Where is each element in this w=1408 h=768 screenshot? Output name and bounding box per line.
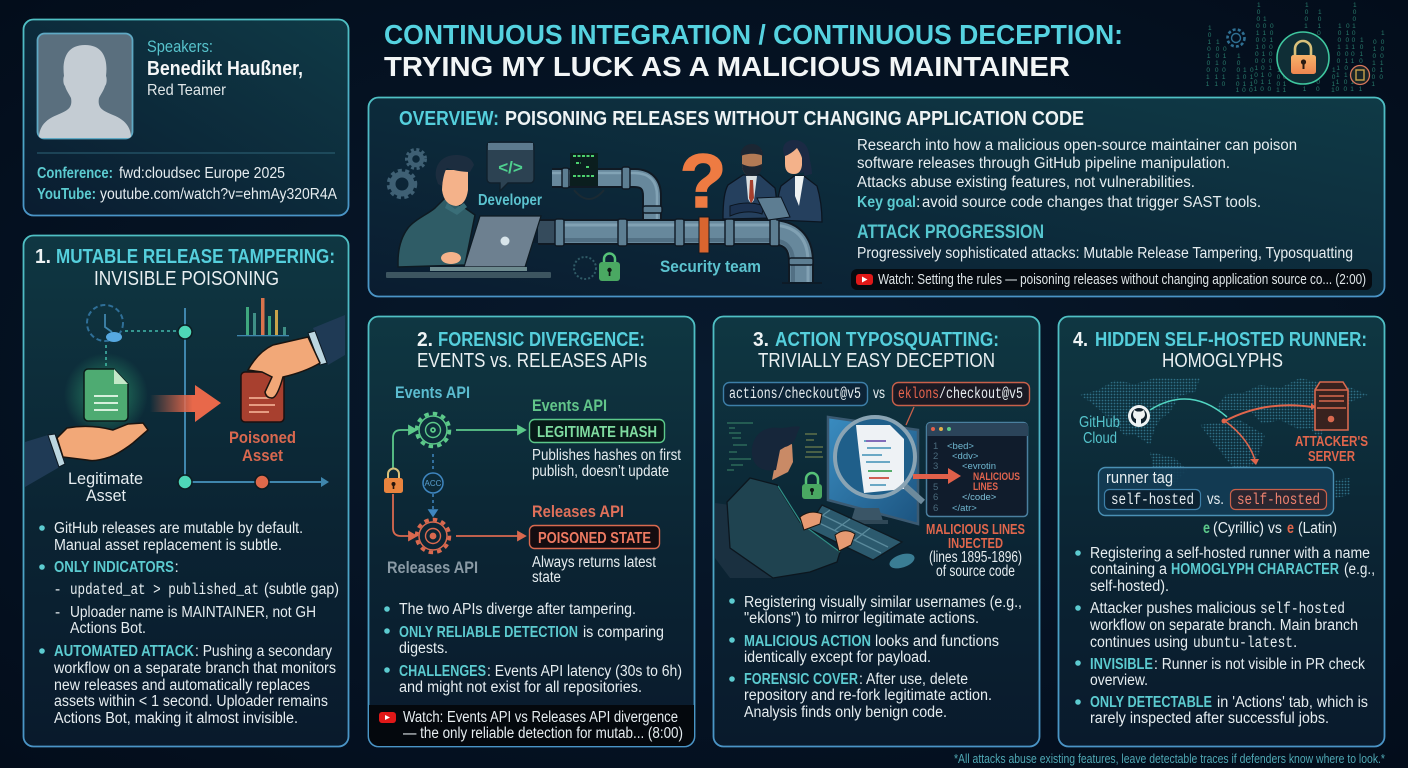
code window: </code> [962, 492, 997, 503]
question mark: ? [680, 139, 726, 224]
bullet list 4: rarely inspected after successful jobs. [1090, 710, 1329, 727]
overview description: avoid source code changes that trigger SAST tools. [922, 194, 1261, 211]
title [384, 19, 1123, 82]
malicious lines caption: MALICIOUS LINES [926, 521, 1025, 538]
conference and YouTube details: Conference: [37, 165, 113, 182]
code window: <ddv> [952, 451, 979, 462]
code window: <evrotin [962, 461, 996, 472]
label: Releases API source: Releases API [387, 558, 478, 577]
code window: 2 [933, 451, 938, 462]
panel: overview [368, 98, 1384, 296]
connection arcs [1150, 399, 1316, 465]
chair [715, 503, 773, 578]
overview description: Key goal [857, 194, 916, 211]
illustration: asset swap [25, 298, 345, 505]
bullet list 1: new releases and automatically replaces [54, 677, 310, 694]
bullet list 2: and might not exist for all repositories. [399, 679, 642, 696]
icon: legitimate document [64, 353, 148, 437]
label: GitHub Cloud [1079, 414, 1120, 447]
icon: GitHub [1128, 405, 1150, 427]
label: GitHub Cloud: Cloud [1083, 430, 1117, 447]
red arrow to malicious lines [913, 468, 961, 484]
heading 3 [753, 329, 999, 372]
homoglyph note: (Latin) [1298, 520, 1337, 537]
bullet list 4: continues using [1090, 634, 1188, 651]
diagram: API divergence [384, 383, 682, 586]
label: Developer: Developer [478, 192, 542, 209]
magnifier over document [835, 417, 923, 502]
code window [926, 422, 1028, 516]
code window: 6 [933, 503, 938, 514]
overview heading: POISONING RELEASES WITHOUT CHANGING APPLICATION CODE [505, 108, 1084, 130]
bullet list 3: Registering visually similar usernames (e.g., [744, 594, 1022, 611]
bullet list 1: workflow on a separate branch that monitors [53, 660, 336, 677]
bullet list 4: self-hosted [1260, 600, 1345, 618]
speaker avatar [38, 34, 132, 138]
panel: 1 mutable release tampering [24, 236, 348, 746]
comparison link: ACC [425, 479, 442, 488]
homoglyph note: e [1287, 520, 1294, 537]
illustration: person inspecting code [715, 407, 923, 578]
bullet list 1: Manual asset replacement is subtle. [54, 537, 282, 554]
decoration: binary rain and padlock: 011 [1282, 74, 1287, 92]
code window: <bed> [947, 441, 974, 452]
bullet list 4: ONLY DETECTABLE [1090, 694, 1212, 711]
bullet list 4: Attacker pushes malicious [1090, 600, 1256, 617]
bullet list 4: Registering a self-hosted runner with a name [1090, 545, 1370, 562]
decoration: binary rain and padlock: 1000101001001 [1254, 2, 1261, 91]
decoration: binary rain and padlock: 0101010100 [1343, 23, 1350, 91]
bullet list 4: HOMOGLYPH CHARACTER [1171, 561, 1339, 578]
label: poisoned asset [229, 428, 296, 465]
bullet list 2: : Events API latency (30s to 6h) [487, 663, 682, 680]
runner tag box [1098, 468, 1334, 516]
malicious lines caption: INJECTED [948, 535, 1003, 552]
decoration: binary rain and padlock: 10100100 [1316, 9, 1322, 91]
comparison link [423, 454, 443, 516]
bullet list 2: is comparing [583, 624, 664, 641]
typosquatted action name [892, 382, 1030, 406]
bullet list 1: - [55, 581, 60, 598]
panel: 2 forensic divergence [368, 316, 694, 746]
mini bar chart [237, 298, 289, 336]
decoration: binary rain and padlock: 1001 [1276, 67, 1281, 92]
attack progression: Progressively sophisticated attacks: Mutable Release Tampering, Typosquatting [857, 245, 1353, 262]
decoration: binary rain and padlock: 0010001010 [1267, 23, 1274, 91]
runner tag box: self-hosted [1111, 491, 1194, 509]
icon: chip badge [1350, 66, 1370, 84]
overview description [857, 137, 1297, 211]
bullet list 3: looks and functions [875, 633, 999, 650]
decoration: binary rain and padlock: 101001 [1359, 37, 1364, 91]
bullet list 2: The two APIs diverge after tampering. [399, 601, 636, 618]
bullet list 1: Actions Bot. [70, 620, 146, 637]
bullet list 4: workflow on separate branch. Main branch [1089, 617, 1358, 634]
code window: LINES [973, 481, 998, 493]
homoglyph note: e [1203, 520, 1210, 537]
overview description: Research into how a malicious open-source maintainer can poison [857, 137, 1297, 154]
runner tag box: runner tag [1106, 468, 1173, 487]
speaker name: Benedikt Haußner, [147, 58, 303, 80]
decoration: binary rain and padlock: 1000110 [1379, 30, 1385, 79]
bullet list 3: MALICIOUS ACTION [744, 633, 871, 650]
heading 2: 2. [417, 329, 433, 351]
icon: green padlock [574, 254, 620, 281]
icon: gear outline [1228, 30, 1244, 46]
bullet list 4: self-hosted). [1090, 578, 1169, 595]
faint code lines [727, 423, 823, 470]
heading 4: HIDDEN SELF-HOSTED RUNNER: [1095, 329, 1367, 351]
decoration: binary rain and padlock: 100101011 [1303, 2, 1309, 91]
conference and YouTube details [37, 165, 338, 203]
bullet list 2: digests. [399, 640, 448, 657]
decoration: binary rain and padlock: 101010011 [1206, 25, 1212, 86]
watch link bar [369, 705, 694, 746]
events API result: publish, doesn’t update [532, 463, 669, 480]
bullet list 1: Actions Bot, making it almost invisible. [54, 710, 298, 727]
code window: 1 [933, 441, 938, 452]
bullet list 1: : [174, 559, 179, 576]
bullet list 4: . [1293, 634, 1297, 651]
bullet list 2 [384, 601, 682, 696]
developer figure [398, 155, 475, 267]
decoration: binary rain and padlock: 10100100110 [1260, 16, 1267, 91]
bullet list 2: CHALLENGES [399, 663, 486, 680]
label: attacker's server: SERVER [1308, 448, 1355, 465]
bullet list 1: - [55, 604, 60, 621]
heading 1: INVISIBLE POISONING [94, 268, 279, 290]
decoration: binary rain and padlock: 010010 [1222, 46, 1227, 86]
conference and YouTube details: YouTube: [37, 186, 96, 203]
panel: 3 action typosquatting [714, 316, 1040, 746]
events API result [530, 396, 682, 480]
icon: clock [87, 305, 123, 342]
speaker name: Speakers: [147, 37, 213, 56]
icon: padlock [1277, 32, 1329, 84]
events API result: Events API [532, 396, 607, 415]
label: GitHub Cloud: GitHub [1079, 414, 1120, 431]
homoglyph note [1203, 520, 1337, 537]
decoration: binary rain and padlock: 1010 [1242, 67, 1247, 92]
red arrow [150, 385, 221, 422]
green flow [393, 414, 525, 468]
label: poisoned asset: Poisoned [229, 428, 296, 447]
malicious lines caption: (lines 1895-1896) [929, 549, 1022, 566]
code window: 6 [933, 492, 938, 503]
decoration: binary rain and padlock: 0101001 [1371, 39, 1377, 86]
red flow [393, 494, 525, 552]
heading 1: 1. [35, 246, 51, 268]
runner tag box: self-hosted [1237, 491, 1320, 509]
monitor [828, 417, 918, 524]
title: TRYING MY LUCK AS A MALICIOUS MAINTAINER [384, 51, 1070, 82]
releases API result: state [532, 569, 561, 586]
device on pipe [570, 153, 604, 199]
malicious lines caption [926, 521, 1025, 580]
bullet list 4: overview. [1090, 672, 1148, 689]
pipeline [520, 167, 822, 283]
releases API result [530, 502, 660, 586]
attack progression [857, 222, 1353, 262]
bullet list 3: : After use, delete [859, 671, 968, 688]
security team figures [723, 140, 822, 222]
code window: </atr> [952, 503, 977, 514]
heading 3: 3. [753, 329, 769, 351]
heading 2 [417, 329, 647, 372]
bullet list 4: ubuntu-latest [1193, 634, 1293, 652]
decoration: binary rain and padlock: 100101 [1236, 53, 1241, 92]
homoglyph note: (Cyrillic) vs [1213, 520, 1282, 537]
decoration: binary rain and padlock: 1011 [1331, 67, 1336, 92]
bullet list 1: assets within < 1 second. Uploader remains [54, 693, 328, 710]
person [727, 426, 855, 578]
bullet list 3: FORENSIC COVER [744, 671, 858, 688]
overview description: Attacks abuse existing features, not vulnerabilities. [857, 174, 1195, 191]
typosquatted action name: eklons [898, 385, 939, 403]
releases API result: POISONED STATE [538, 530, 651, 547]
bullet list 4: (e.g., [1344, 561, 1375, 578]
conference and YouTube details: fwd:cloudsec Europe 2025 [119, 165, 285, 182]
title: CONTINUOUS INTEGRATION / CONTINUOUS DECEPTION: [384, 19, 1123, 50]
bullet list 3 [729, 594, 1022, 721]
overview description: : [916, 194, 920, 211]
label: poisoned asset: Asset [242, 446, 283, 465]
conference and YouTube details: youtube.com/watch?v=ehmAy320R4A [100, 186, 338, 203]
timeline [106, 308, 329, 489]
label: attacker's server: ATTACKER'S [1295, 433, 1368, 450]
icon: poisoned document [241, 372, 284, 422]
label: legitimate asset: Asset [86, 486, 126, 505]
code bubble [487, 142, 534, 191]
bullet list 3: identically except for payload. [744, 649, 931, 666]
keyboard and mouse [807, 505, 916, 571]
events API result: Publishes hashes on first [532, 447, 682, 464]
right hand with sleeve [248, 315, 345, 398]
icon: orange padlock [384, 469, 403, 493]
icon: attacker server [1315, 382, 1348, 430]
decoration: binary rain and padlock [1206, 2, 1385, 92]
heading 1: MUTABLE RELEASE TAMPERING: [56, 246, 335, 268]
heading 2: FORENSIC DIVERGENCE: [438, 329, 645, 351]
bullet list 3: repository and re-fork legitimate action. [744, 687, 992, 704]
bullet list 1: Uploader name is MAINTAINER, not GH [70, 604, 316, 621]
code window: 3 [933, 461, 938, 472]
overview description: software releases through GitHub pipeline manipulation. [857, 155, 1230, 172]
label: legitimate asset: Legitimate [68, 469, 143, 488]
code window: NALICIOUS [973, 471, 1020, 483]
bullet list 2: ONLY RELIABLE DETECTION [399, 624, 578, 641]
label: Events API source: Events API [395, 383, 470, 402]
legit action name: actions/checkout@v5 [729, 385, 861, 403]
bullet list 1: (subtle gap) [264, 581, 339, 598]
bullet list 4 [1075, 545, 1375, 727]
malicious lines caption: of source code [936, 563, 1015, 580]
speaker name: Red Teamer [147, 82, 227, 99]
bullet list 4: : Runner is not visible in PR check [1154, 656, 1365, 673]
watch link bar: — the only reliable detection for mutab... (8:00) [403, 725, 683, 742]
heading 1 [35, 246, 335, 290]
bullet list 1: updated_at > published_at [70, 581, 259, 599]
legit action name [724, 382, 868, 406]
bullet list 1: : Pushing a secondary [195, 643, 332, 660]
decoration: binary rain and padlock: 0110 [1249, 67, 1254, 92]
events API result: LEGITIMATE HASH [537, 424, 657, 441]
bullet list 4: in 'Actions' tab, which is [1217, 694, 1368, 711]
bullet list 1 [39, 520, 339, 727]
bullet list 1: ONLY INDICATORS [54, 559, 174, 576]
panel: speaker [24, 20, 348, 216]
bullet list 1: GitHub releases are mutable by default. [54, 520, 303, 537]
bullet list 3: Analysis finds only benign code. [744, 704, 947, 721]
label: Security team: Security team [660, 257, 761, 276]
callout line [906, 407, 914, 425]
speaker name [147, 37, 303, 99]
icon: gears [388, 150, 426, 198]
panel: 4 hidden self-hosted runner [1058, 316, 1384, 746]
bullet list 4: INVISIBLE [1090, 656, 1153, 673]
bullet list 1: AUTOMATED ATTACK [54, 643, 195, 660]
bullet list 4: containing a [1090, 561, 1167, 578]
heading 4 [1073, 329, 1367, 372]
releases API result: Releases API [532, 502, 624, 521]
heading 4: 4. [1073, 329, 1088, 351]
releases API result: Always returns latest [532, 554, 657, 571]
laptop and desk [386, 216, 551, 278]
decoration: binary rain and padlock: 1001001110 [1335, 23, 1342, 91]
decoration: binary rain and padlock: 1001011 [1214, 39, 1220, 86]
label: legitimate asset [68, 469, 143, 505]
heading 3: TRIVIALLY EASY DECEPTION [758, 350, 995, 372]
illustration: developer, pipeline and security team [386, 139, 822, 283]
heading 4: HOMOGLYPHS [1162, 350, 1283, 372]
world map [1080, 378, 1368, 498]
typosquatted action name: /checkout@v5 [939, 385, 1023, 403]
watch link bar: Watch: Events API vs Releases API divergence [403, 709, 678, 726]
heading 3: ACTION TYPOSQUATTING: [775, 329, 999, 351]
left hand with sleeve [25, 423, 148, 487]
decoration: binary rain and padlock: 10010010111 [1350, 2, 1357, 91]
bullet list 3: "eklons") to mirror legitimate actions. [744, 610, 979, 627]
watch link bar [851, 269, 1372, 290]
code bubble: </> [498, 158, 523, 177]
runner tag box: vs. [1207, 491, 1224, 508]
overview heading: OVERVIEW: [399, 108, 499, 130]
broken pipe segment [699, 217, 709, 253]
vs: vs [873, 385, 885, 402]
code window: 5 [933, 482, 938, 493]
heading 2: EVENTS vs. RELEASES APIs [417, 350, 647, 372]
attack progression: ATTACK PROGRESSION [857, 222, 1044, 243]
icon: green padlock [802, 473, 822, 499]
label: attacker's server [1295, 433, 1368, 465]
